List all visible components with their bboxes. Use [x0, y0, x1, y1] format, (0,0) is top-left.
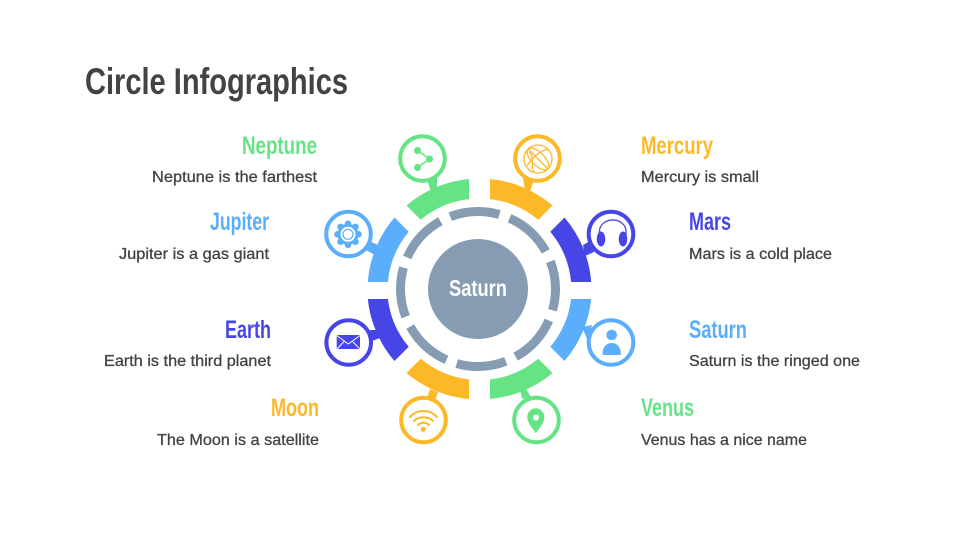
- icon: gear (Jupiter): [326, 212, 378, 256]
- label: Mercury: Mercury is small: [641, 169, 759, 186]
- segment: Earth: [368, 299, 409, 361]
- label: Mercury: [641, 132, 759, 186]
- circular diagram: [368, 179, 591, 399]
- center circle: [428, 239, 528, 339]
- dashed inner ring: [400, 212, 556, 366]
- icon: map pin (Venus): [514, 389, 559, 442]
- icon: headphones (Mars): [583, 212, 633, 256]
- label: Moon: [157, 394, 319, 449]
- label: Earth: Earth: [225, 316, 271, 344]
- label: Neptune: [152, 132, 318, 186]
- label: Mars: Mars: [689, 208, 731, 236]
- label: Jupiter: [119, 208, 270, 263]
- title: Circle Infographics: [85, 61, 348, 102]
- label: Earth: [104, 316, 272, 370]
- label: Venus: Venus: [641, 394, 694, 422]
- label: Moon: Moon: [271, 394, 319, 422]
- segment: Venus: [490, 359, 552, 399]
- label: Moon: The Moon is a satellite: [157, 432, 319, 449]
- segment: Mars: [550, 218, 591, 282]
- segment: Saturn: [550, 299, 591, 361]
- segment: Mercury: [490, 179, 552, 220]
- label: Mercury: Mercury: [641, 132, 713, 160]
- label: Venus: Venus has a nice name: [641, 432, 807, 449]
- icon: wifi (Moon): [401, 389, 446, 442]
- label: Jupiter: Jupiter: [210, 208, 269, 236]
- center circle: Saturn: [449, 275, 507, 301]
- icon: globe (Mercury): [515, 136, 560, 191]
- label: Earth: Earth is the third planet: [104, 353, 272, 370]
- segment: Neptune: [406, 179, 469, 220]
- label: Saturn: Saturn is the ringed one: [689, 353, 860, 370]
- label: Jupiter: Jupiter is a gas giant: [119, 246, 270, 263]
- segment: Jupiter: [368, 218, 409, 282]
- label: Neptune: Neptune is the farthest: [152, 169, 318, 186]
- label: Mars: Mars is a cold place: [689, 246, 832, 263]
- label: Saturn: Saturn: [689, 316, 747, 344]
- icon: share (Neptune): [400, 136, 445, 192]
- label: Venus: [641, 394, 807, 449]
- icon: person (Saturn): [582, 320, 633, 365]
- label: Saturn: [689, 316, 860, 370]
- label: Mars: [689, 208, 832, 263]
- segment: Moon: [406, 359, 469, 399]
- label: Neptune: Neptune: [242, 132, 317, 160]
- icon: envelope (Earth): [326, 320, 380, 365]
